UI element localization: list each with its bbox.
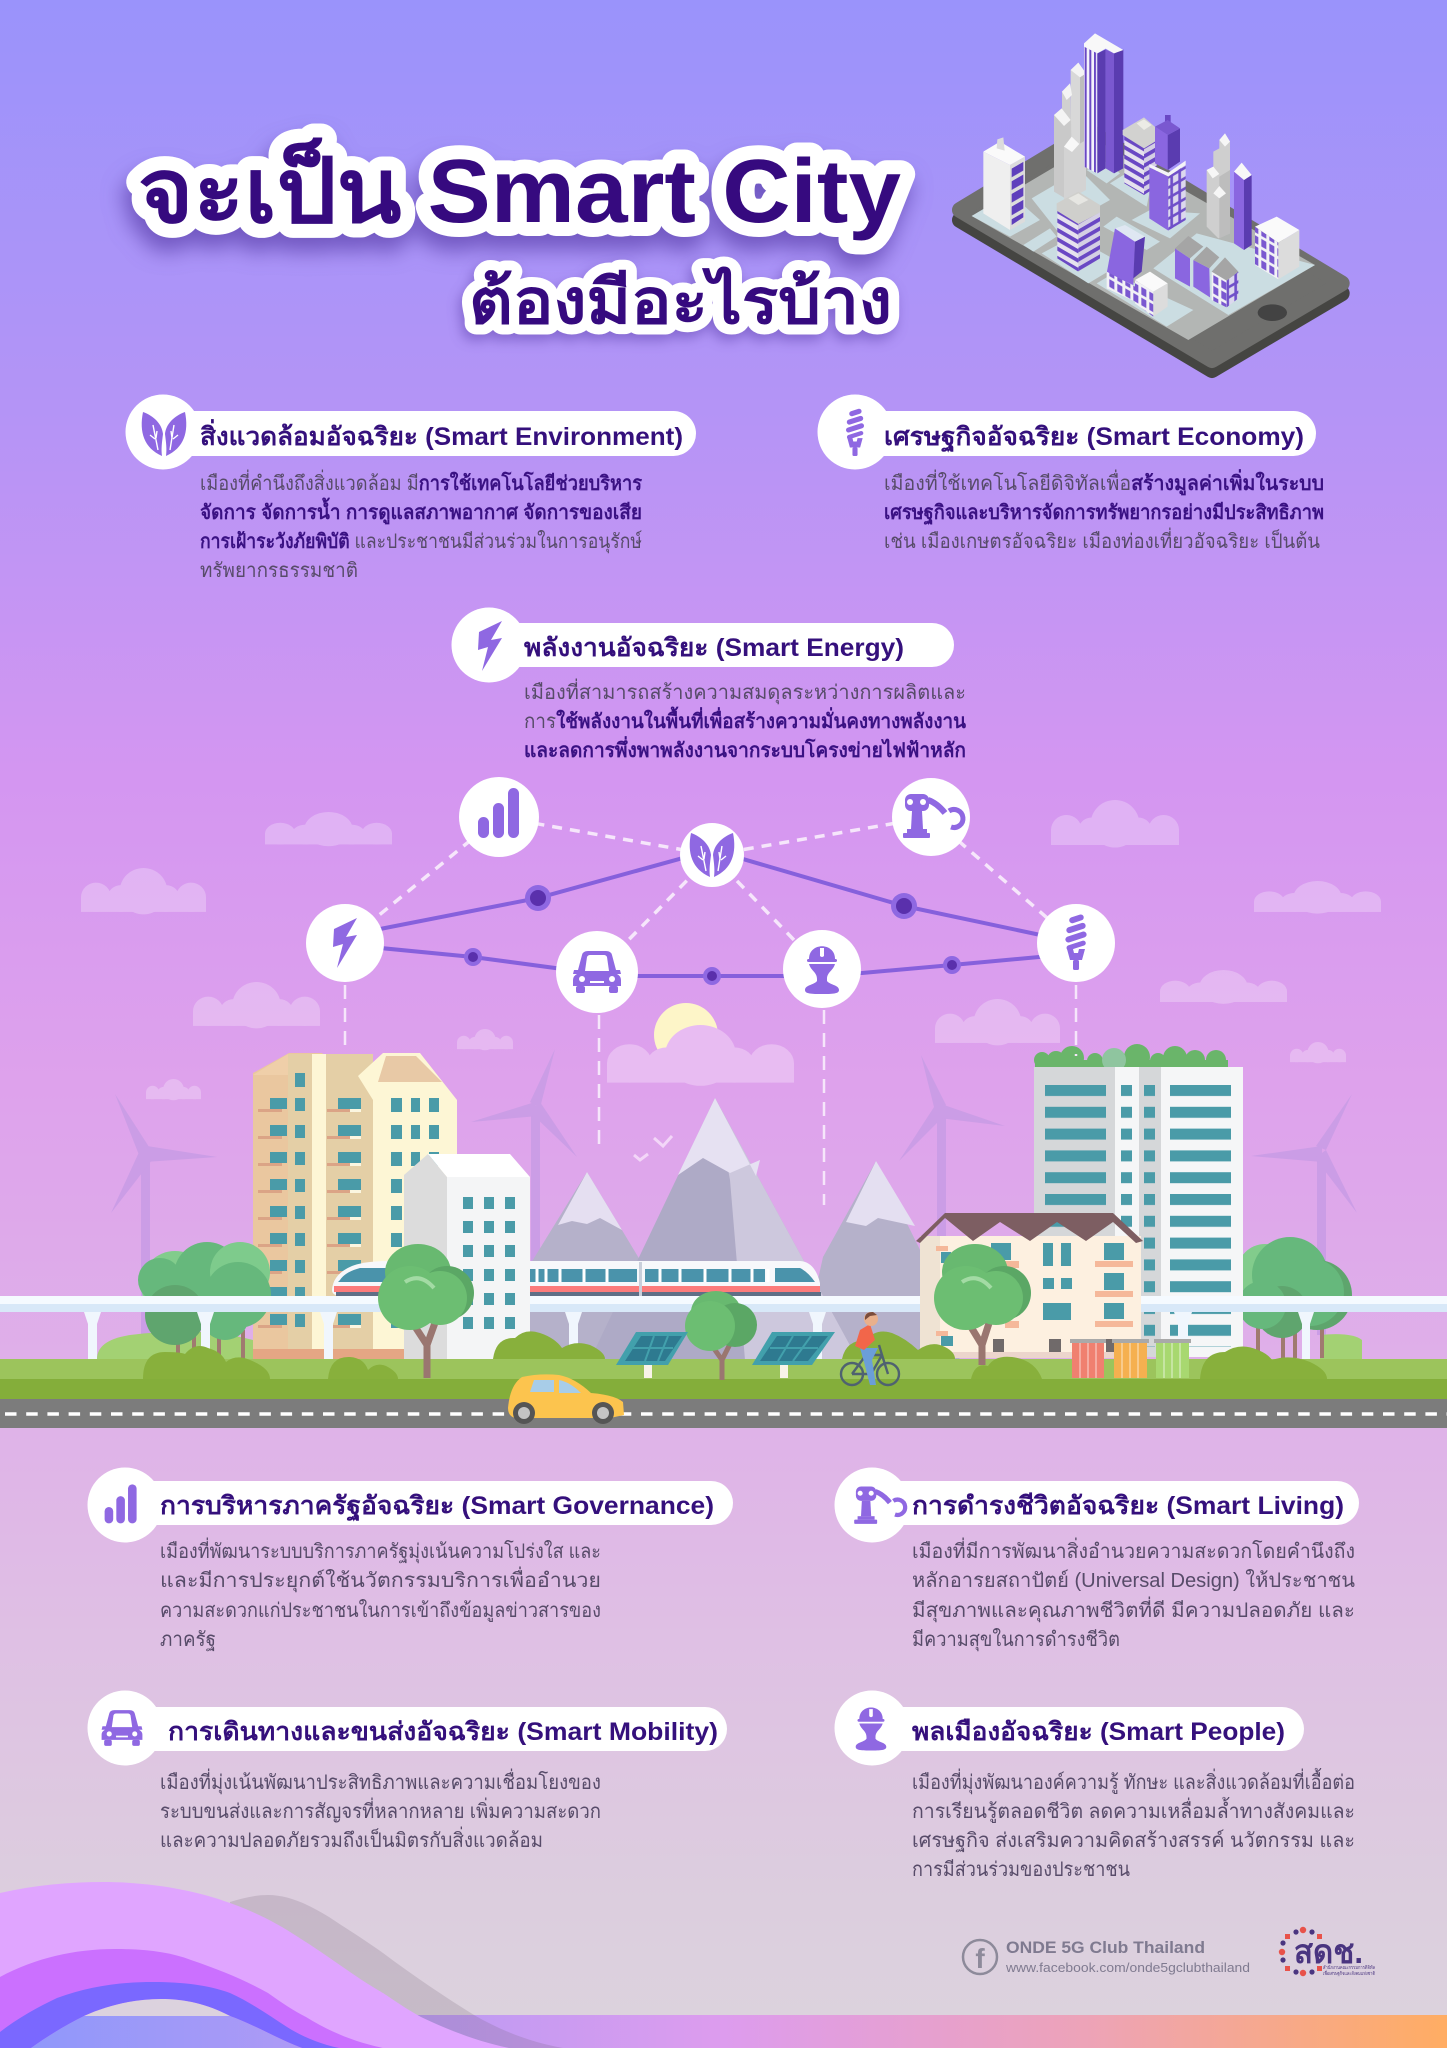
header pill bbox=[122, 1481, 733, 1525]
icon: facebook bbox=[963, 1940, 997, 1974]
footer: Facebook credit bbox=[963, 1938, 1250, 1975]
heading: สิ่งแวดล้อมอัจฉริยะ (Smart Environment) bbox=[200, 419, 683, 451]
body text: ความสะดวกแก่ประชาชนในการเข้าถึงข้อมูลข่าวสารของ bbox=[160, 1599, 601, 1623]
sun bbox=[654, 1003, 718, 1067]
heading: พลังงานอัจฉริยะ (Smart Energy) bbox=[524, 634, 904, 662]
icon: facebook: f bbox=[975, 1943, 985, 1974]
wind turbines bbox=[111, 1049, 1357, 1348]
body text bbox=[912, 1768, 1355, 1881]
birds bbox=[634, 1136, 672, 1160]
body text: และความปลอดภัยรวมถึงเป็นมิตรกับสิ่งแวดล้อม bbox=[160, 1826, 543, 1852]
footer: ONDE logo bbox=[1279, 1927, 1375, 1977]
building: small white block bbox=[1135, 272, 1168, 317]
body text: เมืองที่คำนึงถึงสิ่งแวดล้อม มีการใช้เทคโนโลยีช่วยบริหาร bbox=[200, 469, 642, 495]
body text: มีความสุขในการดำรงชีวิต bbox=[912, 1628, 1120, 1652]
network node: car bbox=[556, 931, 638, 1013]
building: white windows block bbox=[1255, 217, 1299, 279]
icon badge: leaf bbox=[126, 394, 200, 470]
body text bbox=[200, 469, 642, 582]
body text bbox=[884, 468, 1324, 553]
decorative waves bottom left bbox=[0, 1882, 563, 2048]
panel: Smart Governance bbox=[88, 1468, 733, 1651]
logo tagline: เพื่อเศรษฐกิจและสังคมแห่งชาติ bbox=[1323, 1970, 1375, 1977]
title line 1: จะเป็น Smart City bbox=[138, 136, 901, 242]
panel: Smart Energy bbox=[452, 608, 966, 762]
trash bins bbox=[1070, 1339, 1191, 1378]
building: tall purple tower bbox=[1084, 33, 1123, 173]
page url: www.facebook.com/onde5gclubthailand bbox=[1005, 1960, 1250, 1975]
tree by solar panels bbox=[685, 1291, 757, 1380]
building: white striped tower bbox=[983, 137, 1025, 230]
body text: ระบบขนส่งและการสัญจรที่หลากหลาย เพิ่มความสะดวก bbox=[160, 1797, 601, 1823]
heading: เศรษฐกิจอัจฉริยะ (Smart Economy) bbox=[884, 423, 1304, 453]
body text bbox=[160, 1537, 601, 1651]
road bbox=[0, 1399, 1447, 1428]
header pill bbox=[122, 1707, 727, 1751]
yellow car bbox=[508, 1374, 624, 1424]
building: purple office tower bbox=[1149, 115, 1186, 231]
phone body bbox=[960, 132, 1342, 370]
network node: person bbox=[783, 930, 861, 1008]
body text: เศรษฐกิจ ส่งเสริมความคิดสร้างสรรค์ นวัตกรรม และ bbox=[912, 1829, 1355, 1852]
network node: leaf bbox=[680, 823, 744, 887]
bottom colour strip bbox=[0, 2015, 1447, 2048]
network node: bolt bbox=[306, 904, 384, 982]
body text: และลดการพึ่งพาพลังงานจากระบบโครงข่ายไฟฟ้าหลัก bbox=[524, 735, 966, 762]
building: grey slim towers right bbox=[1207, 133, 1230, 238]
header pill bbox=[163, 411, 696, 456]
icon badge: bulb bbox=[818, 394, 892, 470]
building: cream townhouse bbox=[916, 1213, 1143, 1358]
tree cluster right bbox=[1237, 1237, 1352, 1358]
building: hatched tower front bbox=[1057, 192, 1100, 272]
logo dots bbox=[1279, 1927, 1322, 1976]
building: tall white green-roof tower bbox=[1034, 1044, 1243, 1357]
building: grey stepped tower bbox=[1054, 63, 1086, 202]
building: purple cluster bbox=[1175, 236, 1238, 307]
body text bbox=[160, 1768, 601, 1852]
building: purple slab bbox=[1107, 225, 1145, 302]
city blocks bbox=[972, 162, 1315, 327]
network connector lines bbox=[345, 817, 1076, 1205]
body text: และมีการประยุกต์ใช้นวัตกรรมบริการเพื่ออำนวย bbox=[160, 1566, 601, 1593]
building: slim purple tower bbox=[1234, 163, 1252, 250]
body text: เช่น เมืองเกษตรอัจฉริยะ เมืองท่องเที่ยวอัจฉริยะ เป็นต้น bbox=[884, 527, 1320, 553]
tree by townhouse bbox=[934, 1244, 1031, 1365]
elevated track bbox=[0, 1296, 1447, 1359]
ground bbox=[0, 1359, 1447, 1399]
body text: เมืองที่สามารถสร้างความสมดุลระหว่างการผลิตและ bbox=[524, 678, 966, 705]
icon badge: car bbox=[88, 1690, 162, 1766]
body text: การเรียนรู้ตลอดชีวิต ลดความเหลื่อมล้ำทางสังคมและ bbox=[912, 1797, 1355, 1824]
body text: เมืองที่ใช้เทคโนโลยีดิจิทัลเพื่อสร้างมูลค่าเพิ่มในระบบ bbox=[884, 468, 1324, 497]
panel: Smart People bbox=[834, 1690, 1355, 1881]
solar panels bbox=[616, 1332, 835, 1378]
body text: เมืองที่มุ่งพัฒนาองค์ความรู้ ทักษะ และสิ่งแวดล้อมที่เอื้อต่อ bbox=[912, 1768, 1355, 1795]
heading: การเดินทางและขนส่งอัจฉริยะ (Smart Mobility) bbox=[168, 1718, 718, 1746]
panel: Smart Living bbox=[834, 1468, 1359, 1652]
title line 2: ต้องมีอะไรบ้าง bbox=[469, 266, 892, 337]
body text: เมืองที่มีการพัฒนาสิ่งอำนวยความสะดวกโดยคำนึงถึง bbox=[912, 1537, 1355, 1563]
header pill bbox=[870, 1707, 1304, 1751]
logo tagline bbox=[1323, 1964, 1375, 1977]
icon badge: person bbox=[834, 1690, 910, 1766]
body text: การใช้พลังงานในพื้นที่เพื่อสร้างความมั่นคงทางพลังงาน bbox=[524, 706, 966, 733]
body text: เมืองที่พัฒนาระบบบริการภาครัฐมุ่งเน้นความโปร่งใส และ bbox=[160, 1537, 601, 1564]
body text: เศรษฐกิจและบริหารจัดการทรัพยากรอย่างมีประสิทธิภาพ bbox=[884, 501, 1324, 526]
isometric phone city illustration bbox=[960, 33, 1342, 370]
building: white block bbox=[404, 1154, 530, 1359]
tree cluster left bbox=[138, 1242, 271, 1359]
mountains bbox=[505, 1098, 960, 1360]
body text: การเฝ้าระวังภัยพิบัติ และประชาชนมีส่วนร่วมในการอนุรักษ์ bbox=[200, 530, 642, 554]
body text: การมีส่วนร่วมของประชาชน bbox=[912, 1859, 1130, 1881]
body text: ทรัพยากรธรรมชาติ bbox=[200, 560, 358, 582]
body text: มีสุขภาพและคุณภาพชีวิตที่ดี มีความปลอดภัย และ bbox=[912, 1596, 1355, 1623]
header pill bbox=[870, 1481, 1359, 1525]
heading: พลเมืองอัจฉริยะ (Smart People) bbox=[912, 1718, 1285, 1746]
icon badge: bolt bbox=[452, 608, 526, 682]
header pill bbox=[851, 411, 1316, 456]
monorail train bbox=[332, 1261, 821, 1296]
building: hatched tower back bbox=[1123, 117, 1157, 195]
body text: จัดการ จัดการน้ำ การดูแลสภาพอากาศ จัดการของเสีย bbox=[200, 497, 642, 526]
body text: ภาครัฐ bbox=[160, 1629, 216, 1651]
logo tagline: สำนักงานคณะกรรมการดิจิทัล bbox=[1323, 1964, 1375, 1971]
tree centre left bbox=[378, 1244, 474, 1378]
page name: ONDE 5G Club Thailand bbox=[1006, 1938, 1205, 1957]
body text bbox=[524, 678, 966, 762]
body text bbox=[912, 1537, 1355, 1652]
body text: เมืองที่มุ่งเน้นพัฒนาประสิทธิภาพและความเชื่อมโยงของ bbox=[160, 1768, 601, 1795]
network node: chart bbox=[459, 777, 539, 857]
hills behind ground bbox=[97, 1331, 1362, 1359]
heading: การบริหารภาครัฐอัจฉริยะ (Smart Governance) bbox=[160, 1492, 714, 1522]
network node: bulb bbox=[1037, 904, 1115, 982]
panel: Smart Environment bbox=[126, 394, 696, 582]
clouds bbox=[81, 800, 1381, 1100]
building: tan apartment tower bbox=[253, 1053, 457, 1359]
title bbox=[138, 136, 901, 337]
cyclist bbox=[841, 1312, 899, 1385]
logo wordmark: สดช. bbox=[1294, 1933, 1363, 1970]
header pill bbox=[486, 623, 954, 667]
icon badge: chart bbox=[88, 1468, 162, 1542]
panel: Smart Mobility bbox=[88, 1690, 727, 1852]
icon badge: robot bbox=[834, 1468, 910, 1542]
body text: หลักอารยสถาปัตย์ (Universal Design) ให้ประชาชน bbox=[912, 1569, 1355, 1592]
panel: Smart Economy bbox=[818, 394, 1324, 553]
bushes bbox=[143, 1331, 1327, 1379]
cloud in front of sun bbox=[607, 1025, 794, 1086]
heading: การดำรงชีวิตอัจฉริยะ (Smart Living) bbox=[912, 1492, 1344, 1520]
network node: robot bbox=[892, 778, 970, 856]
